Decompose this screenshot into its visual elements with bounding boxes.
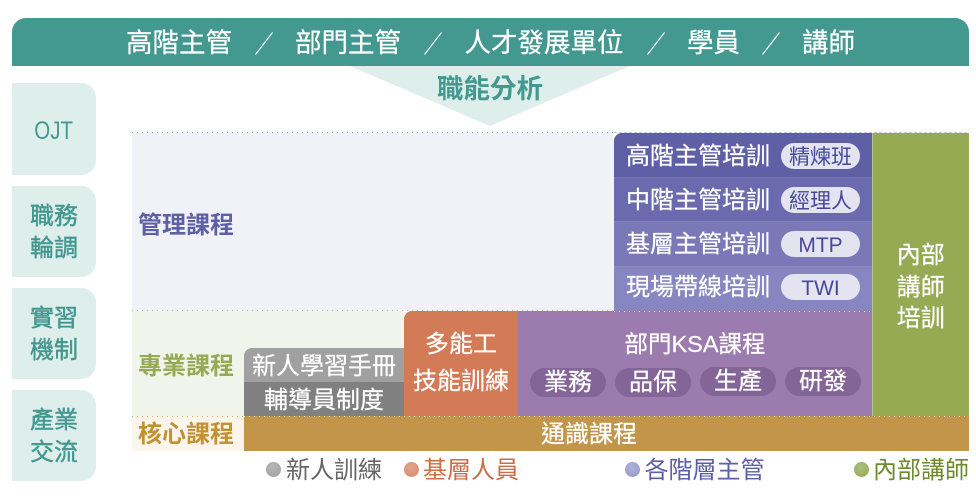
legend: new hire training (266, 457, 382, 484)
legend dot (404, 462, 419, 477)
legend dot (854, 462, 869, 477)
heading: trainees: 學員 (687, 28, 740, 58)
panel label: core courses: 核心課程 (138, 421, 234, 448)
pill: production: 生產 (714, 368, 762, 395)
row: middle management training: 中階主管培訓 (626, 187, 770, 214)
panel: core courses band (132, 416, 244, 451)
heading: instructors: 講師 (802, 28, 855, 58)
legend text: 基層人員 (423, 457, 519, 484)
pill: business: 業務 (544, 369, 592, 396)
heading: talent development unit: 人才發展單位 (464, 28, 624, 58)
panel: professional courses band (132, 311, 404, 416)
row: middle management training (614, 178, 872, 222)
legend dot (625, 462, 640, 477)
heading: department heads: 部門主管 (295, 28, 401, 58)
tab: internship: 機制 (30, 336, 78, 364)
tab: OJT: OJT (35, 117, 73, 145)
row: first-line management training: 基層主管培訓 (626, 231, 770, 258)
heading: senior executives: 高階主管 (126, 28, 232, 58)
row: middle management training: 經理人 (789, 190, 852, 212)
block: multi-skill training: 多能工 (425, 331, 497, 358)
column: internal instructor training (872, 133, 968, 416)
funnel label: 職能分析 (437, 74, 543, 104)
block: multi-skill training: 技能訓練 (413, 368, 509, 394)
tab: industry exchange: 產業 (30, 406, 78, 434)
row: on-site supervisor training: TWI (801, 277, 840, 300)
column: internal instructor training: 講師 (897, 274, 945, 300)
separator slash (255, 32, 273, 55)
pill: research and development: 研發 (799, 368, 847, 395)
tab: job rotation (12, 186, 96, 277)
column: internal instructor training: 培訓 (897, 305, 945, 332)
legend: internal instructors (854, 457, 969, 484)
pill: business (530, 368, 606, 397)
block: department KSA courses (518, 311, 872, 416)
row: on-site supervisor training: 現場帶線培訓 (626, 274, 770, 301)
separator slash (762, 32, 780, 55)
tab: industry exchange (12, 390, 96, 481)
row: senior management training (614, 133, 872, 178)
stack: management training levels (614, 133, 872, 311)
tab: industry exchange: 交流 (30, 438, 78, 466)
row: first-line management training: MTP (798, 234, 843, 257)
pill: production (700, 367, 776, 396)
panel label: management courses: 管理課程 (138, 212, 234, 239)
block: general courses (244, 416, 968, 451)
row: senior management training: 高階主管培訓 (626, 143, 770, 170)
block: mentor system: 輔導員制度 (264, 387, 384, 414)
legend text: 新人訓練 (286, 457, 382, 484)
block: multi-skill training (404, 311, 518, 416)
tab: internship (12, 288, 96, 379)
KSA heading: 部門KSA課程 (624, 331, 766, 357)
separator slash (424, 32, 442, 55)
tab: job rotation: 輪調 (30, 234, 78, 262)
pill: quality assurance (615, 368, 691, 397)
funnel triangle: competency analysis (350, 66, 630, 126)
legend: front-line staff (404, 457, 519, 484)
tab: job rotation: 職務 (30, 202, 78, 230)
column: internal instructor training: 內部 (897, 242, 945, 269)
panel: management courses band (132, 133, 614, 311)
pill: quality assurance: 品保 (629, 369, 677, 396)
row: on-site supervisor training (614, 266, 872, 311)
legend text: 各階層主管 (644, 457, 764, 484)
row: senior management training: 精煉班 (789, 146, 852, 169)
top bar: stakeholders (12, 18, 968, 66)
legend dot (266, 462, 281, 477)
row: first-line management training (614, 222, 872, 266)
general courses label: 通識課程 (541, 421, 637, 448)
pill: research and development (785, 367, 861, 396)
legend text: 內部講師 (873, 457, 969, 484)
block: mentor system (244, 382, 404, 416)
block: new employee handbook: 新人學習手冊 (252, 353, 396, 380)
separator slash (647, 32, 665, 55)
panel label: professional courses: 專業課程 (138, 353, 234, 380)
tab: internship: 實習 (30, 304, 78, 332)
legend: managers at all levels (625, 457, 764, 484)
tab: OJT (12, 83, 96, 175)
